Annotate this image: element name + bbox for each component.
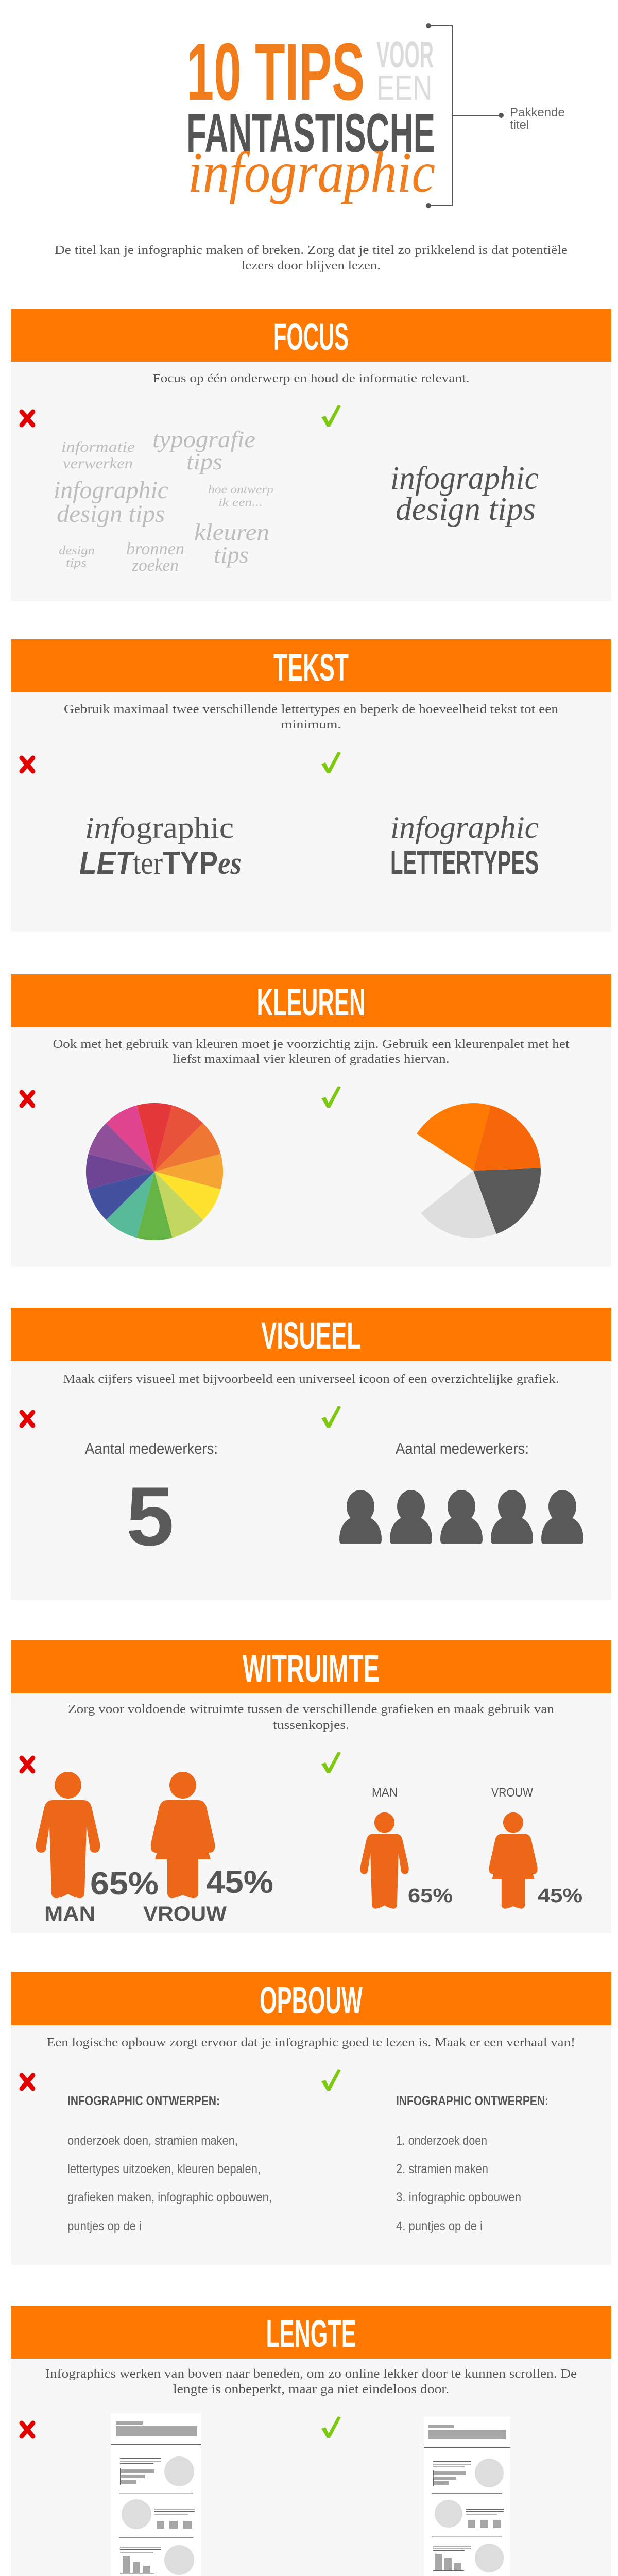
right: labels: MAN — [372, 1786, 398, 1800]
right: focused title: infographic — [390, 460, 539, 496]
right: consistent fonts — [390, 810, 539, 881]
annotation label: titel — [510, 118, 529, 132]
header: kleuren — [11, 974, 611, 1027]
right: label: Aantal medewerkers: — [396, 1439, 529, 1458]
wrong: word cloud — [54, 426, 273, 575]
description: Ook met het gebruik van kleuren moet je voorzichtig zijn. Gebruik een kleurenpalet met het — [53, 1038, 570, 1051]
wrong: run-on list: lettertypes uitzoeken, kleuren bepalen, — [67, 2162, 261, 2176]
description — [45, 2367, 577, 2396]
right: percentages — [408, 1885, 582, 1907]
icon: green check — [321, 2416, 341, 2438]
right: labels: VROUW — [491, 1786, 533, 1800]
wrong: run-on list: grafieken maken, infographic opbouwen, — [67, 2190, 272, 2205]
wrong: number label: Aantal medewerkers: — [85, 1439, 218, 1458]
panel: visueel — [11, 1361, 611, 1600]
wrong: crowded labels: MAN — [44, 1903, 95, 1925]
title: voor een: VOOR — [376, 35, 434, 76]
right: numbered list: 2. stramien maken — [396, 2162, 488, 2176]
header: lengte — [11, 2306, 611, 2359]
title: voor een — [376, 35, 434, 108]
right: percentages: 45% — [538, 1885, 582, 1907]
right: limited palette pie chart — [417, 1103, 541, 1238]
wrong: run-on list: INFOGRAPHIC ONTWERPEN: — [67, 2094, 220, 2108]
description: Zorg voor voldoende witruimte tussen de verschillende grafieken en maak gebruik van — [68, 1703, 554, 1716]
icon: green check — [321, 1406, 341, 1428]
header: focus: FOCUS — [273, 315, 349, 358]
title block — [55, 23, 568, 273]
right: numbered list: INFOGRAPHIC ONTWERPEN: — [396, 2094, 548, 2108]
description: liefst maximaal vier kleuren of gradaties hiervan. — [173, 1053, 449, 1066]
wrong: word cloud: tips — [214, 541, 249, 568]
header: visueel — [11, 1308, 611, 1361]
icon: red cross — [22, 2423, 33, 2436]
description — [53, 1038, 570, 1066]
annotation bracket: pakkende titel — [426, 24, 503, 208]
icon: green check — [321, 1752, 341, 1773]
description: lengte is onbeperkt, maar ga niet eindeloos door. — [173, 2383, 449, 2396]
wrong: run-on list: onderzoek doen, stramien maken, — [67, 2133, 238, 2148]
wrong: crowded labels: VROUW — [143, 1903, 227, 1925]
description: Infographics werken van boven naar beneden, om zo online lekker door te kunnen scrollen. De — [45, 2367, 577, 2381]
icon: red cross — [22, 412, 33, 425]
section: opbouw — [11, 1972, 611, 2233]
description: Maak cijfers visueel met bijvoorbeeld een universeel icoon of een overzichtelijke grafiek. — [63, 1372, 559, 1386]
header: witruimte: WITRUIMTE — [243, 1647, 380, 1690]
header: witruimte — [11, 1640, 611, 1693]
right: numbered list: 4. puntjes op de i — [396, 2219, 483, 2233]
wrong: word cloud: verwerken — [63, 455, 133, 472]
icon: red cross — [22, 1412, 33, 1426]
description — [68, 1703, 554, 1732]
header: lengte: LENGTE — [266, 2312, 356, 2355]
annotation label: Pakkende — [510, 106, 565, 120]
header: opbouw: OPBOUW — [260, 1979, 363, 2022]
icon: red cross — [22, 758, 33, 771]
wrong: run-on list — [67, 2094, 272, 2233]
description: Een logische opbouw zorgt ervoor dat je infographic goed te lezen is. Maak er een verhaal van! — [47, 2036, 575, 2049]
intro text: lezers door blijven lezen. — [242, 259, 381, 273]
right: focused title — [390, 460, 539, 527]
wrong: word cloud: typografie — [152, 426, 255, 452]
panel: lengte — [11, 2359, 611, 2576]
wrong: word cloud: design tips — [57, 500, 165, 528]
wrong: big number 5: 5 — [126, 1470, 174, 1563]
description: minimum. — [281, 718, 341, 732]
header: tekst — [11, 639, 611, 692]
wrong: big man figure — [36, 1772, 100, 1898]
intro text: De titel kan je infographic maken of breken. Zorg dat je titel zo prikkelend is dat potentiële — [55, 244, 568, 257]
title: 10 tips: 10 TIPS — [186, 27, 365, 117]
wrong: big woman figure — [151, 1772, 215, 1898]
description: tussenkopjes. — [273, 1719, 349, 1732]
panel: kleuren — [11, 1027, 611, 1267]
title: infographic script: infographic — [188, 141, 435, 205]
wrong: word cloud: hoe ontwerp — [208, 483, 273, 496]
wrong: word cloud: infographic — [54, 477, 168, 504]
right: small woman figure — [489, 1812, 538, 1909]
panel: witruimte — [11, 1693, 611, 1933]
title: fantastische: FANTASTISCHE — [186, 102, 435, 164]
wrong: crowded labels: 45% — [206, 1865, 273, 1900]
description — [64, 703, 558, 732]
header: tekst: TEKST — [273, 646, 349, 689]
right: numbered list: 3. infographic opbouwen — [396, 2190, 521, 2205]
panel: opbouw — [11, 2025, 611, 2265]
right: small man figure — [360, 1812, 409, 1909]
header: focus — [11, 309, 611, 362]
wrong: endless infographic mockup — [111, 2413, 201, 2576]
header: visueel: VISUEEL — [261, 1314, 361, 1357]
wrong: word cloud: informatie — [61, 438, 135, 455]
header: opbouw — [11, 1972, 611, 2025]
panel: tekst — [11, 692, 611, 932]
wrong: run-on list: puntjes op de i — [67, 2219, 142, 2233]
icon: green check — [321, 2069, 341, 2091]
wrong: rainbow pie chart — [86, 1103, 223, 1240]
description: Focus op één onderwerp en houd de informatie relevant. — [152, 372, 470, 385]
section: tekst — [11, 639, 611, 881]
section: witruimte — [11, 1640, 611, 1925]
wrong: mixed fonts: LETterTYPes — [79, 845, 242, 881]
wrong: word cloud: ik een... — [218, 496, 263, 509]
description: Gebruik maximaal twee verschillende lettertypes en beperk de hoeveelheid tekst tot een — [64, 703, 558, 716]
title: voor een: EEN — [376, 69, 432, 108]
icon: red cross — [22, 2075, 33, 2089]
wrong: word cloud: tips — [66, 556, 87, 570]
right: numbered list: 1. onderzoek doen — [396, 2133, 487, 2148]
panel: focus — [11, 362, 611, 601]
right: focused title: design tips — [396, 490, 536, 527]
intro text — [55, 244, 568, 273]
wrong: mixed fonts: infographic — [85, 811, 234, 844]
wrong: mixed fonts — [79, 811, 242, 881]
right: consistent fonts: infographic — [390, 810, 539, 844]
icon: red cross — [22, 1092, 33, 1106]
right: five person icons — [339, 1490, 583, 1544]
right: numbered list — [396, 2094, 548, 2233]
icon: green check — [321, 405, 341, 427]
annotation label — [510, 106, 565, 132]
wrong: word cloud: bronnen — [126, 539, 184, 558]
icon: green check — [321, 752, 341, 773]
wrong: crowded labels: 65% — [90, 1866, 159, 1902]
wrong: word cloud: design — [59, 544, 95, 557]
wrong: word cloud: zoeken — [131, 556, 179, 575]
right: compact infographic mockup — [424, 2417, 510, 2576]
section: visueel — [11, 1308, 611, 1563]
section: kleuren — [11, 974, 611, 1241]
icon: green check — [321, 1086, 341, 1108]
right: labels — [372, 1786, 533, 1800]
section: focus — [11, 309, 611, 575]
wrong: crowded labels — [44, 1865, 273, 1925]
right: percentages: 65% — [408, 1885, 453, 1907]
icon: red cross — [22, 1758, 33, 1771]
section: lengte — [11, 2306, 611, 2575]
header: kleuren: KLEUREN — [256, 981, 366, 1024]
wrong: word cloud: tips — [186, 448, 222, 474]
wrong: word cloud: kleuren — [194, 519, 269, 545]
